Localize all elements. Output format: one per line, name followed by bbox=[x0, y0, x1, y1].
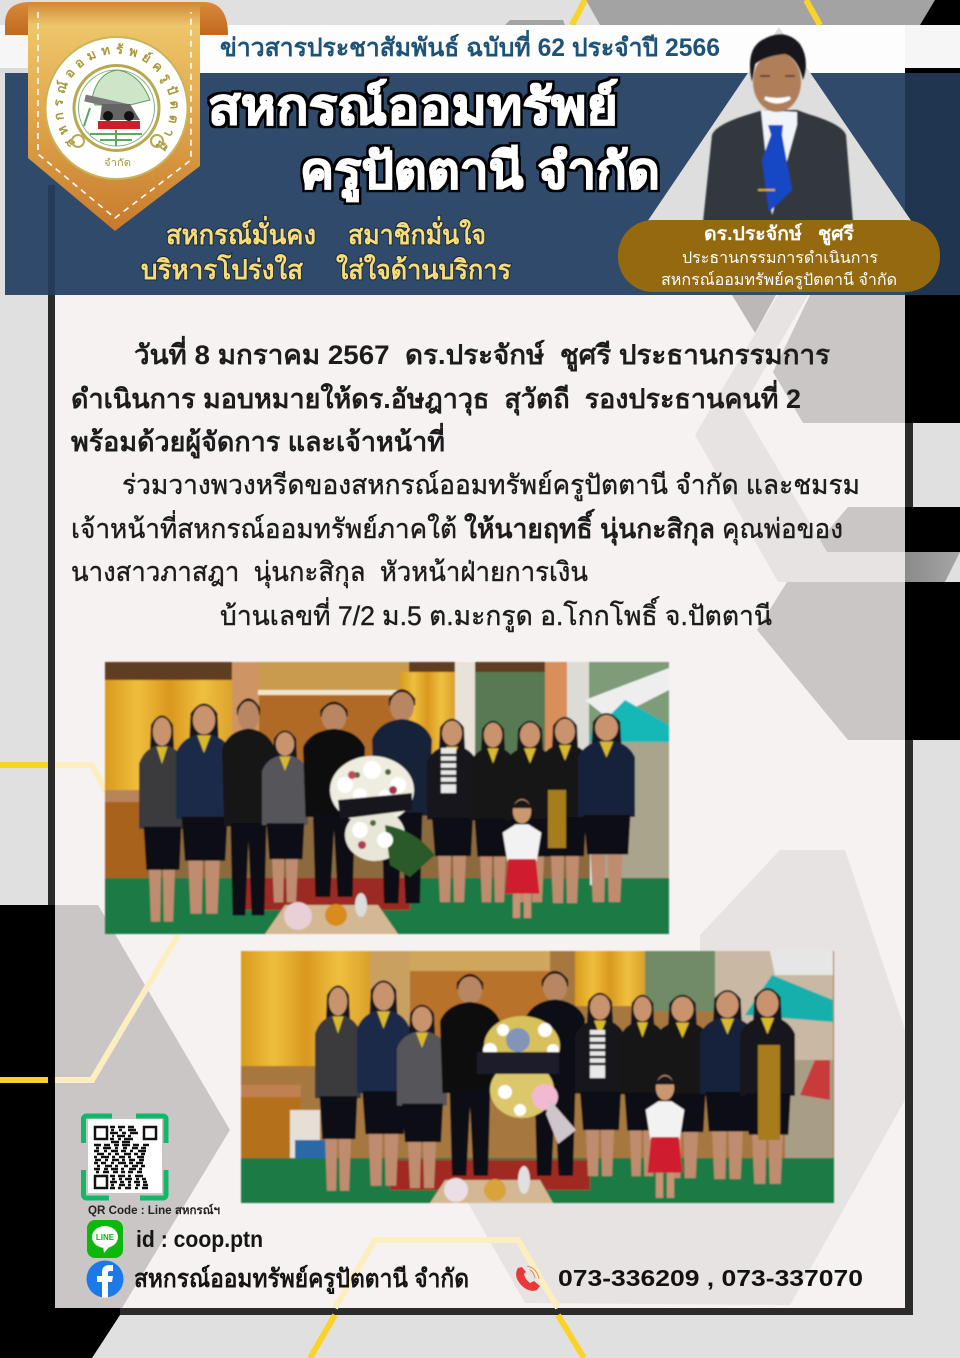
group of people bbox=[315, 971, 795, 1198]
body text: ดำเนินการ มอบหมายให้ดร.อัษฎาวุธ สุวัตถี รองประธานคนที่ 2 bbox=[71, 379, 801, 416]
background: top grey shapes bbox=[505, 0, 960, 25]
offering table bbox=[430, 1166, 553, 1203]
body text: นางสาวภาสฎา นุ่นกะสิกุล หัวหน้าฝ่ายการเงิน bbox=[71, 557, 588, 589]
body text bbox=[71, 335, 860, 632]
yellow accent lines bbox=[0, 765, 584, 1358]
background: black side blocks bbox=[0, 295, 960, 1358]
wreath bbox=[477, 1016, 576, 1144]
header: issue text: ข่าวสารประชาสัมพันธ์ ฉบับที่ 62 ประจำปี 2566 bbox=[220, 30, 720, 62]
triangle behind portrait bbox=[647, 27, 912, 222]
cooperative logo: จำกัด bbox=[104, 158, 131, 169]
Facebook name: สหกรณ์ออมทรัพย์ครูปัตตานี จำกัด bbox=[134, 1264, 469, 1295]
body text: บ้านเลขที่ 7/2 ม.5 ต.มะกรูด อ.โกกโพธิ์ จ.ปัตตานี bbox=[220, 596, 772, 632]
header: issue strip bbox=[0, 25, 960, 73]
icon: LINE: LINE bbox=[96, 1233, 115, 1242]
panel decorative hexagons bbox=[55, 295, 905, 1308]
name pill bbox=[618, 220, 940, 292]
body text: พร้อมด้วยผู้จัดการ และเจ้าหน้าที่ bbox=[71, 422, 445, 459]
header: title bbox=[208, 79, 660, 202]
header: slogan: บริหารโปร่งใส bbox=[141, 253, 303, 285]
background: grey right strip bbox=[905, 552, 960, 582]
header: slogan: สหกรณ์มั่นคง bbox=[166, 215, 316, 250]
photo 2 bbox=[241, 951, 834, 1203]
QR label: QR Code : Line สหกรณ์ฯ bbox=[88, 1203, 220, 1217]
group of people bbox=[139, 689, 635, 922]
name pill: ดร.ประจักษ์ ชูศรี bbox=[704, 223, 855, 246]
body text: ให้นายฤทธิ์ นุ่นกะสิกุล bbox=[464, 509, 715, 546]
wreath bbox=[330, 756, 435, 877]
body text: คุณพ่อของ bbox=[722, 514, 843, 546]
name pill: ประธานกรรมการดำเนินการ bbox=[682, 250, 878, 267]
QR code bbox=[84, 1116, 166, 1198]
LINE id: id : coop.ptn bbox=[136, 1226, 263, 1252]
portrait bbox=[703, 34, 853, 222]
header: navy banner bbox=[5, 73, 960, 295]
icon: LINE bbox=[87, 1220, 123, 1258]
body text: เจ้าหน้าที่สหกรณ์ออมทรัพย์ภาคใต้ bbox=[71, 510, 457, 544]
body text: ร่วมวางพวงหรีดของสหกรณ์ออมทรัพย์ครูปัตตานี จำกัด และชมรม bbox=[122, 469, 860, 501]
photo 1 bbox=[105, 662, 669, 934]
name pill: สหกรณ์ออมทรัพย์ครูปัตตานี จำกัด bbox=[661, 270, 897, 290]
header: slogan: สมาชิกมั่นใจ bbox=[348, 215, 486, 250]
offering table bbox=[265, 893, 398, 934]
cooperative logo: สหกรณ์ออมทรัพย์ครูปัตตานี bbox=[55, 43, 179, 152]
icon: Facebook bbox=[86, 1260, 124, 1298]
icon: phone bbox=[516, 1266, 540, 1291]
body text: วันที่ 8 มกราคม 2567 ดร.ประจักษ์ ชูศรี ประธานกรรมการ bbox=[134, 335, 830, 372]
phone numbers: 073-336209 , 073-337070 bbox=[558, 1265, 863, 1291]
content panel bbox=[48, 295, 913, 1315]
header: slogan bbox=[141, 215, 511, 285]
header: slogan: ใส่ใจด้านบริการ bbox=[336, 254, 511, 285]
header: title: สหกรณ์ออมทรัพย์ bbox=[208, 79, 618, 135]
ribbon badge bbox=[5, 2, 228, 231]
header: title: ครูปัตตานี จำกัด bbox=[300, 143, 660, 202]
